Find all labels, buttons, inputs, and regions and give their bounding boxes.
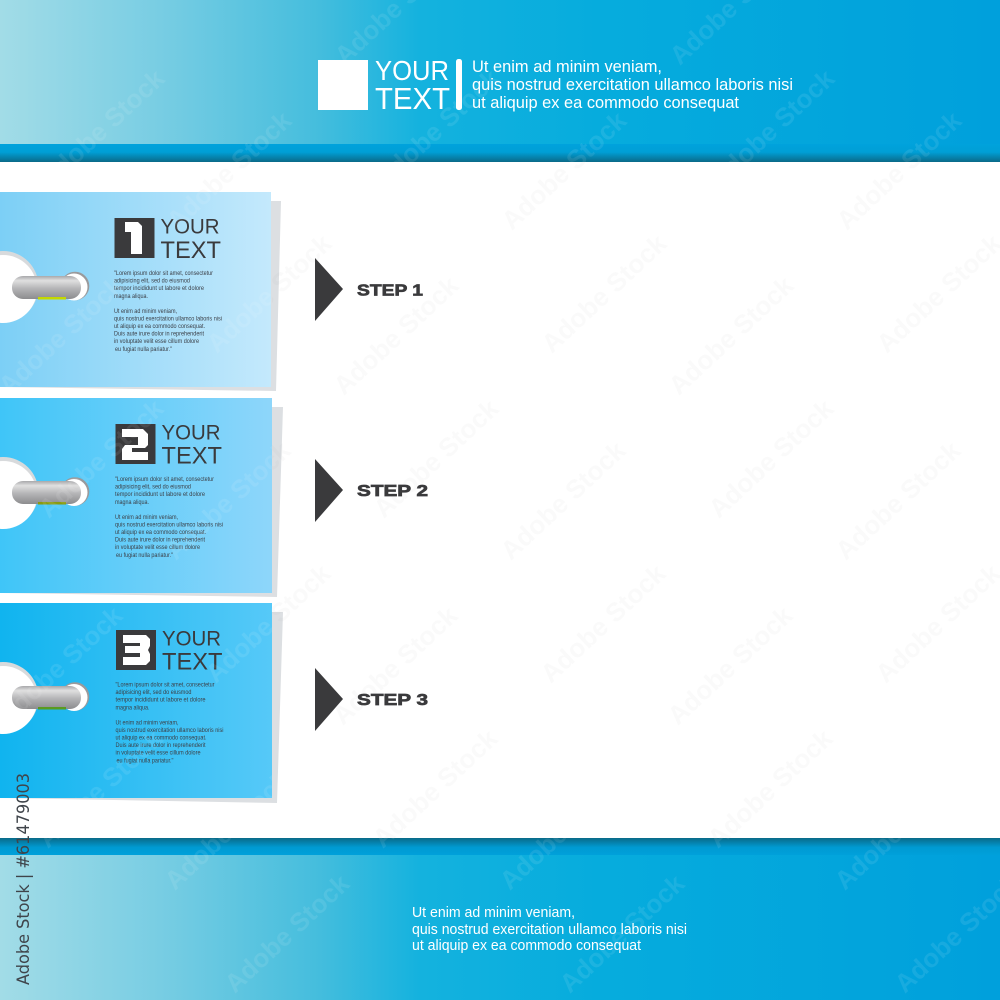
watermark on blue areas: Adobe Stock bbox=[829, 765, 966, 896]
step 2 label: STEP 2 bbox=[357, 483, 428, 500]
card 1 body text bbox=[114, 270, 222, 353]
footer text block: quis nostrud exercitation ullamco laboris nisi bbox=[412, 922, 687, 938]
watermark on blue areas: Adobe Stock bbox=[32, 723, 169, 854]
card 3 body text: adipisicing elit, sed do eiusmod bbox=[116, 689, 192, 696]
card 3 body text: in voluptate velit esse cillum dolore bbox=[116, 750, 201, 757]
vertical stock id text: Adobe Stock | #61479003 bbox=[14, 773, 34, 985]
watermark on blue areas: Adobe Stock bbox=[161, 105, 298, 236]
watermark on white area: Adobe Stock bbox=[535, 558, 672, 689]
card 1 body text: magna aliqua. bbox=[114, 293, 148, 300]
watermark on white area: Adobe Stock bbox=[831, 105, 968, 236]
footer text block: ut aliquip ex ea commodo consequat bbox=[412, 938, 641, 954]
card 2 body text: Ut enim ad minim veniam, bbox=[115, 514, 178, 521]
watermark on blue areas: Adobe Stock bbox=[201, 228, 338, 359]
footer band bbox=[0, 838, 1000, 1000]
watermark on blue areas: Adobe Stock bbox=[200, 558, 337, 689]
header logo: square with your text: TEXT bbox=[375, 81, 450, 116]
header logo: square with your text: YOUR bbox=[375, 55, 449, 86]
card 3 heading: TEXT bbox=[162, 648, 223, 676]
arrow: step 3 bbox=[315, 668, 343, 731]
card 2 body text: adipisicing elit, sed do eiusmod bbox=[115, 484, 191, 491]
card 2 body text: "Lorem ipsum dolor sit amet, consectetur bbox=[115, 476, 215, 483]
watermark on blue areas: Adobe Stock bbox=[34, 63, 171, 194]
header text block: quis nostrud exercitation ullamco laboris nisi bbox=[472, 76, 793, 94]
watermark on blue areas: Adobe Stock bbox=[159, 765, 296, 896]
panel: card 2 bbox=[0, 398, 283, 597]
watermark on white area: Adobe Stock bbox=[702, 723, 839, 854]
card 1 body text: adipisicing elit, sed do eiusmod bbox=[114, 278, 190, 285]
toggle: card 3 bbox=[12, 686, 81, 710]
watermark on white area: Adobe Stock bbox=[830, 435, 967, 566]
watermark on white area: Adobe Stock bbox=[160, 435, 297, 566]
watermark on white area: Adobe Stock bbox=[536, 228, 673, 359]
card 2 body text: eu fugiat nulla pariatur." bbox=[116, 552, 173, 559]
card 2 heading bbox=[162, 420, 222, 470]
card 3 body text: eu fugiat nulla pariatur." bbox=[116, 757, 174, 764]
watermark on blue areas: Adobe Stock bbox=[369, 63, 506, 194]
header band bbox=[0, 0, 1000, 162]
card 3 body text: "Lorem ipsum dolor sit amet, consectetur bbox=[116, 682, 215, 688]
panel: card 1 bbox=[0, 192, 281, 391]
watermark on blue areas: Adobe Stock bbox=[367, 723, 504, 854]
arrow: step 1 bbox=[315, 258, 343, 321]
card 1 body text: ut aliquip ex ea commodo consequat. bbox=[114, 323, 205, 330]
watermark on white area: Adobe Stock bbox=[200, 558, 337, 689]
step 1 label: STEP 1 bbox=[357, 282, 423, 300]
card 3 body text: quis nostrud exercitation ullamco laboris nisi bbox=[116, 727, 224, 734]
card 1 body text: tempor incididunt ut labore et dolore bbox=[114, 285, 204, 292]
card 2 body text: Duis aute irure dolor in reprehenderit bbox=[115, 537, 205, 544]
header text block bbox=[472, 58, 793, 112]
card 2 body text: tempor incididunt ut labore et dolore bbox=[115, 491, 205, 498]
card 1 body text: in voluptate velit esse cillum dolore bbox=[114, 338, 199, 345]
footer text block: Ut enim ad minim veniam, bbox=[412, 905, 575, 921]
card 2 heading: YOUR bbox=[162, 420, 220, 444]
watermark on white area: Adobe Stock bbox=[663, 270, 800, 401]
card 2 heading: TEXT bbox=[162, 442, 222, 470]
card 1 heading: YOUR bbox=[160, 214, 220, 238]
card 1 heading: TEXT bbox=[160, 237, 221, 264]
card 1 body text: eu fugiat nulla pariatur." bbox=[115, 346, 172, 353]
watermark on blue areas: Adobe Stock bbox=[494, 765, 631, 896]
header logo: square with your text bbox=[318, 55, 462, 116]
number box 3 bbox=[116, 630, 156, 670]
watermark on blue areas: Adobe Stock bbox=[219, 868, 356, 999]
watermark on blue areas: Adobe Stock bbox=[831, 105, 968, 236]
watermark on white area: Adobe Stock bbox=[367, 723, 504, 854]
watermark on white area: Adobe Stock bbox=[201, 228, 338, 359]
watermark on white area: Adobe Stock bbox=[496, 105, 633, 236]
panel: card 3 bbox=[0, 603, 283, 803]
watermark on blue areas: Adobe Stock bbox=[496, 105, 633, 236]
header text block: Ut enim ad minim veniam, bbox=[472, 58, 662, 76]
card 3 body text: Duis aute irure dolor in reprehenderit bbox=[116, 742, 206, 749]
card 2 body text: in voluptate velit esse cillum dolore bbox=[115, 544, 200, 551]
card 3 body text: tempor incididunt ut labore et dolore bbox=[116, 697, 206, 704]
card 2 body text: magna aliqua. bbox=[115, 499, 149, 506]
card 2 body text: ut aliquip ex ea commodo consequat. bbox=[115, 529, 206, 536]
header text block: ut aliquip ex ea commodo consequat bbox=[472, 94, 739, 112]
card 1 body text: quis nostrud exercitation ullamco laboris nisi bbox=[114, 315, 222, 322]
card 1 body text: "Lorem ipsum dolor sit amet, consectetur bbox=[114, 270, 214, 277]
watermark on blue areas: Adobe Stock bbox=[702, 723, 839, 854]
watermark on white area: Adobe Stock bbox=[495, 435, 632, 566]
card 2 body text: quis nostrud exercitation ullamco laboris nisi bbox=[115, 521, 223, 528]
watermark on white area: Adobe Stock bbox=[368, 393, 505, 524]
card 3 body text: magna aliqua. bbox=[116, 704, 150, 711]
step 3 label: STEP 3 bbox=[357, 692, 428, 709]
watermark on blue areas: Adobe Stock bbox=[554, 868, 691, 999]
watermark on white area: Adobe Stock bbox=[161, 105, 298, 236]
card 3 body text bbox=[116, 682, 224, 764]
card 1 heading bbox=[160, 214, 221, 264]
card 3 body text: Ut enim ad minim veniam, bbox=[116, 719, 179, 726]
card 3 body text: ut aliquip ex ea commodo consequat. bbox=[116, 734, 207, 742]
watermark on white area: Adobe Stock bbox=[327, 600, 464, 731]
card 2 body text bbox=[115, 476, 223, 559]
number box 2 bbox=[116, 424, 156, 464]
arrow: step 2 bbox=[315, 459, 343, 522]
footer text block bbox=[412, 905, 687, 954]
watermark on white area: Adobe Stock bbox=[703, 393, 840, 524]
watermark on white area bbox=[160, 105, 1000, 854]
watermark on white area: Adobe Stock bbox=[662, 600, 799, 731]
card 3 heading bbox=[162, 626, 223, 676]
watermark on white area: Adobe Stock bbox=[328, 270, 465, 401]
watermark on blue areas: Adobe Stock bbox=[704, 63, 841, 194]
card 1 body text: Duis aute irure dolor in reprehenderit bbox=[114, 331, 204, 338]
number box 1 bbox=[114, 218, 154, 258]
card 1 body text: Ut enim ad minim veniam, bbox=[114, 308, 177, 315]
toggle: card 1 bbox=[12, 276, 81, 300]
toggle: card 2 bbox=[12, 481, 81, 504]
card 3 heading: YOUR bbox=[162, 626, 221, 650]
watermark on blue areas: Adobe Stock bbox=[160, 435, 297, 566]
watermark on blue areas: Adobe Stock bbox=[33, 393, 170, 524]
